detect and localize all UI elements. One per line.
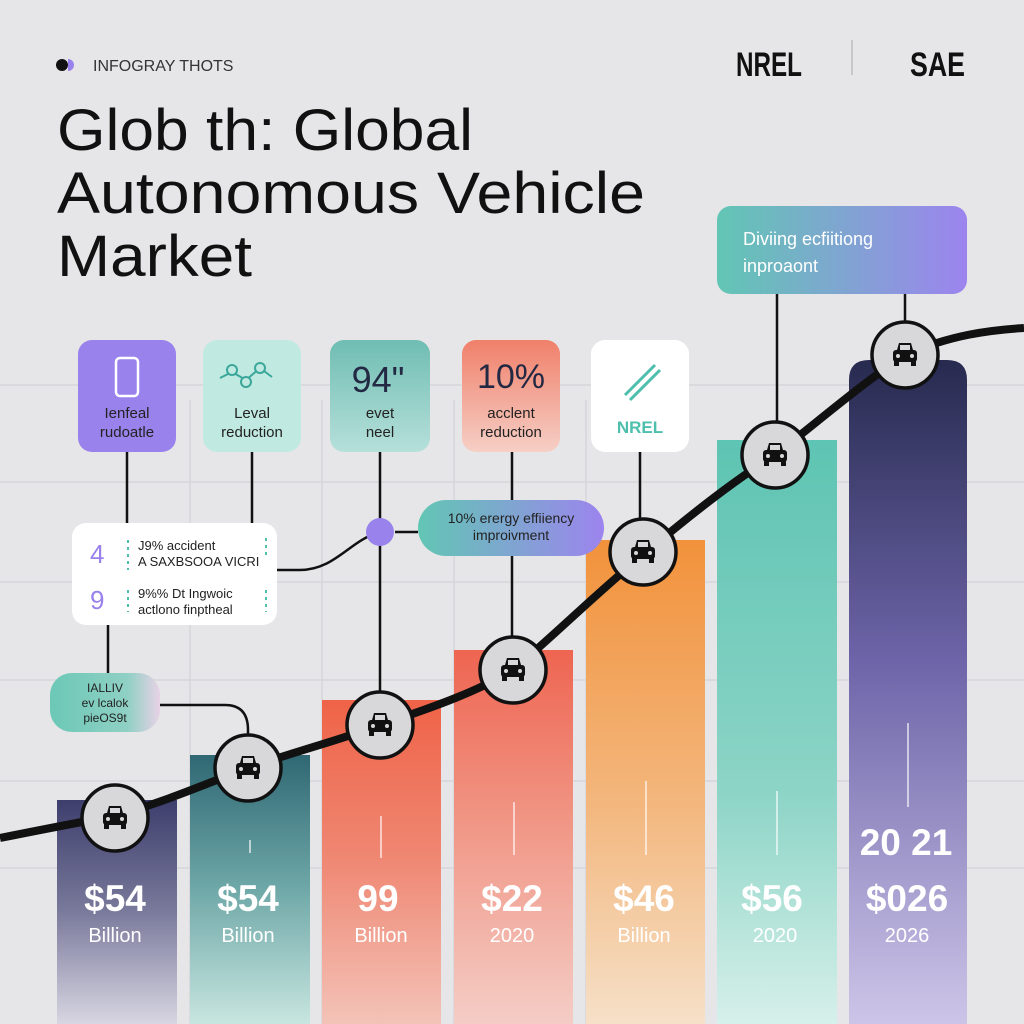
- left pill: IALLIV: [87, 681, 123, 695]
- card 4: reduction: [480, 424, 542, 441]
- card 4: acclent: [487, 405, 536, 422]
- white stats box: 9%% Dt Ingwoic: [138, 586, 233, 601]
- bar value labels: 2020: [753, 925, 797, 947]
- node dot: [366, 518, 394, 546]
- header partner logos: NREL: [736, 46, 802, 84]
- white stats box: A SAXBSOOA VICRI: [138, 554, 259, 569]
- white stats box: actlono finptheal: [138, 602, 233, 617]
- card 3: evet: [366, 405, 395, 422]
- bar value labels: Billion: [354, 925, 408, 947]
- white stats box: 4: [90, 539, 104, 569]
- card 5: [591, 340, 689, 452]
- trend line: [0, 328, 1024, 838]
- energy pill: 10% erergy effiiency: [448, 510, 574, 526]
- bar value labels: [84, 822, 952, 947]
- left pill: pieOS9t: [83, 711, 127, 725]
- card 3: neel: [366, 424, 394, 441]
- top callout: [717, 206, 967, 294]
- card 1: [78, 340, 176, 452]
- left pill: ev lcalok: [82, 696, 129, 710]
- bar value labels: Billion: [617, 925, 671, 947]
- header logo: INFOGRAY THOTS: [93, 58, 233, 75]
- bar value labels: $54: [217, 878, 279, 919]
- top callout: Diviing ecfiitiong: [743, 229, 873, 249]
- bar value labels: 20 21: [860, 822, 952, 863]
- title: [57, 98, 645, 289]
- top callout: inproaont: [743, 256, 818, 276]
- card 3: [330, 340, 430, 452]
- bar value labels: 2020: [490, 925, 534, 947]
- bar value labels: 99: [357, 878, 399, 919]
- bar value labels: $56: [741, 878, 803, 919]
- card 2: [203, 340, 301, 452]
- bar chart: [57, 360, 967, 1024]
- card 4: 10%: [477, 358, 545, 396]
- bar value labels: $54: [84, 878, 146, 919]
- left pill: [50, 673, 160, 732]
- bar value labels: Billion: [88, 925, 142, 947]
- white stats box: J9% accident: [138, 538, 216, 553]
- title: Glob th: Global: [57, 98, 473, 163]
- card 2: reduction: [221, 424, 283, 441]
- card 2: Leval: [234, 405, 270, 422]
- energy pill: improivment: [473, 527, 549, 543]
- bar value labels: $22: [481, 878, 543, 919]
- bar value labels: $026: [866, 878, 948, 919]
- card 3: 94": [352, 359, 404, 400]
- header partner logos: SAE: [910, 46, 965, 84]
- white stats box: 9: [90, 585, 104, 615]
- car markers: [82, 322, 938, 851]
- card 1: Ienfeal: [104, 405, 150, 422]
- bar value labels: Billion: [221, 925, 275, 947]
- card 1: rudoatle: [100, 424, 154, 441]
- bar value labels: 2026: [885, 925, 929, 947]
- title: Autonomous Vehicle: [57, 161, 645, 226]
- card 5: NREL: [617, 418, 663, 437]
- bar value labels: $46: [613, 878, 675, 919]
- connector lines: [108, 294, 905, 740]
- energy pill: [418, 500, 604, 556]
- white stats box: [72, 523, 277, 625]
- header partner logos: [736, 40, 965, 84]
- card 4: [462, 340, 560, 452]
- title: Market: [57, 224, 252, 289]
